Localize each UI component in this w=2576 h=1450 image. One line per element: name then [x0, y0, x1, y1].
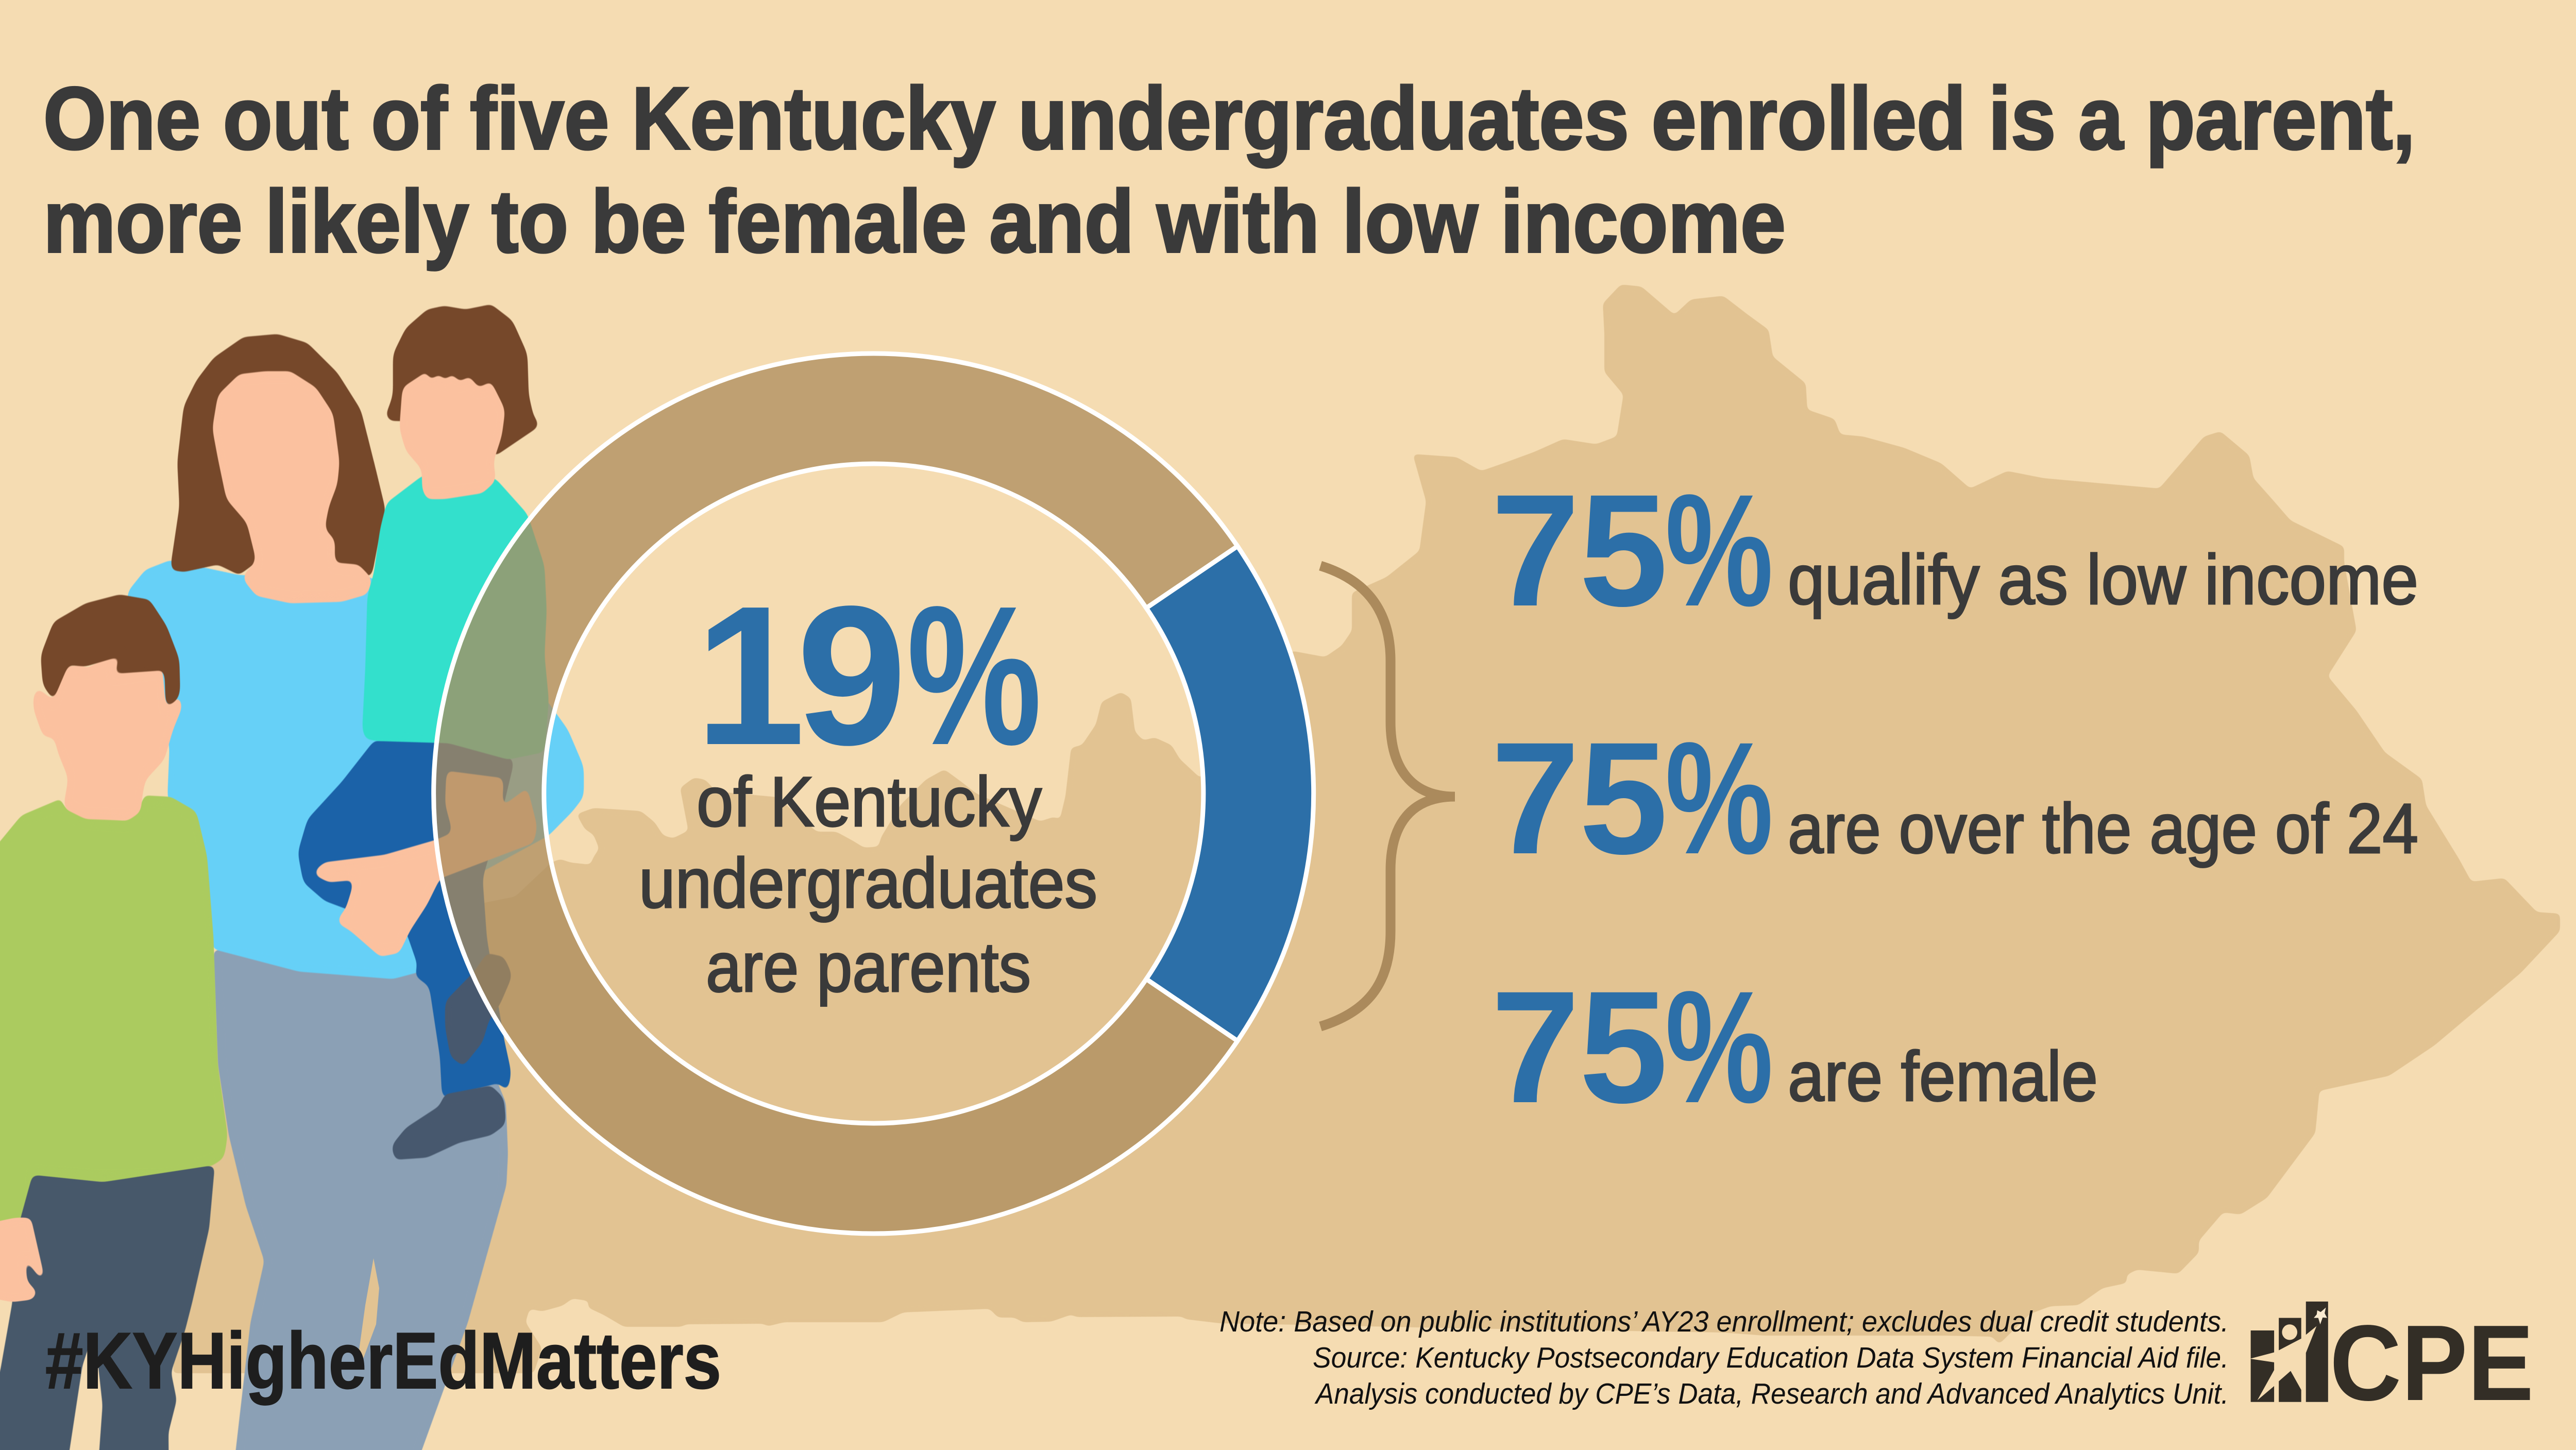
label line one: of Kentucky — [697, 763, 1042, 841]
stat value: 75 — [1491, 957, 1668, 1136]
notes and source — [1219, 1305, 2229, 1410]
donut chart: 19 percent — [434, 353, 1314, 1234]
child: jeans — [298, 737, 515, 1098]
logo mark: bars and star figure — [2251, 1302, 2328, 1402]
title line two: more likely to be female and with low income — [43, 172, 1786, 271]
family illustration — [0, 304, 584, 1450]
boy: pants — [0, 1165, 215, 1450]
stat value: % — [1665, 957, 1773, 1136]
stat: age — [1491, 709, 2418, 887]
child: shoe one — [445, 953, 513, 1066]
mother: shirt — [127, 560, 584, 979]
child: shirt — [362, 476, 549, 760]
boy: hand — [0, 1218, 44, 1302]
stat value: % — [1665, 709, 1773, 887]
child: face and neck — [399, 371, 505, 499]
CPE logo — [2251, 1302, 2534, 1423]
child: shoe two — [391, 1086, 506, 1160]
title line one: One out of five Kentucky undergraduates enrolled is a parent, — [43, 69, 2415, 168]
donut centre label — [639, 564, 1097, 1007]
stat label: are over the age of 24 — [1788, 789, 2418, 868]
child: hair — [379, 304, 541, 456]
source line: Source: Kentucky Postsecondary Education Data System Financial Aid file. — [1313, 1341, 2229, 1374]
brace — [1320, 566, 1455, 1026]
note line: Note: Based on public institutions’ AY23 enrollment; excludes dual credit students. — [1219, 1305, 2229, 1338]
donut segment: parents — [1146, 546, 1314, 1041]
statistics list — [1491, 461, 2418, 1136]
stat: female — [1491, 957, 2098, 1136]
mother: arm and hand — [311, 771, 537, 957]
boy: face and ears — [33, 652, 183, 820]
logo wordmark: CPE — [2330, 1303, 2534, 1423]
title — [43, 69, 2415, 271]
donut segment: other undergraduates — [434, 353, 1238, 1234]
Kentucky map silhouette — [173, 284, 2560, 1373]
mother: jeans — [213, 949, 508, 1450]
stat value: % — [1665, 461, 1773, 639]
boy: sweater — [0, 795, 228, 1222]
big number: % — [907, 564, 1042, 786]
hashtag: #KYHigherEdMatters — [45, 1316, 721, 1405]
stat label: are female — [1788, 1037, 2098, 1116]
mother: hair — [170, 334, 386, 577]
label line three: are parents — [706, 928, 1031, 1007]
stat value: 75 — [1491, 709, 1668, 887]
analysis line: Analysis conducted by CPE’s Data, Research and Advanced Analytics Unit. — [1314, 1377, 2229, 1410]
big number: 19 — [695, 564, 907, 786]
mother: face and neck — [212, 371, 373, 603]
label line two: undergraduates — [639, 844, 1097, 923]
boy: hair — [41, 595, 180, 707]
stat value: 75 — [1491, 461, 1668, 639]
stat: low income — [1491, 461, 2418, 639]
gap between mother's legs — [359, 1258, 379, 1365]
stat label: qualify as low income — [1788, 541, 2418, 619]
